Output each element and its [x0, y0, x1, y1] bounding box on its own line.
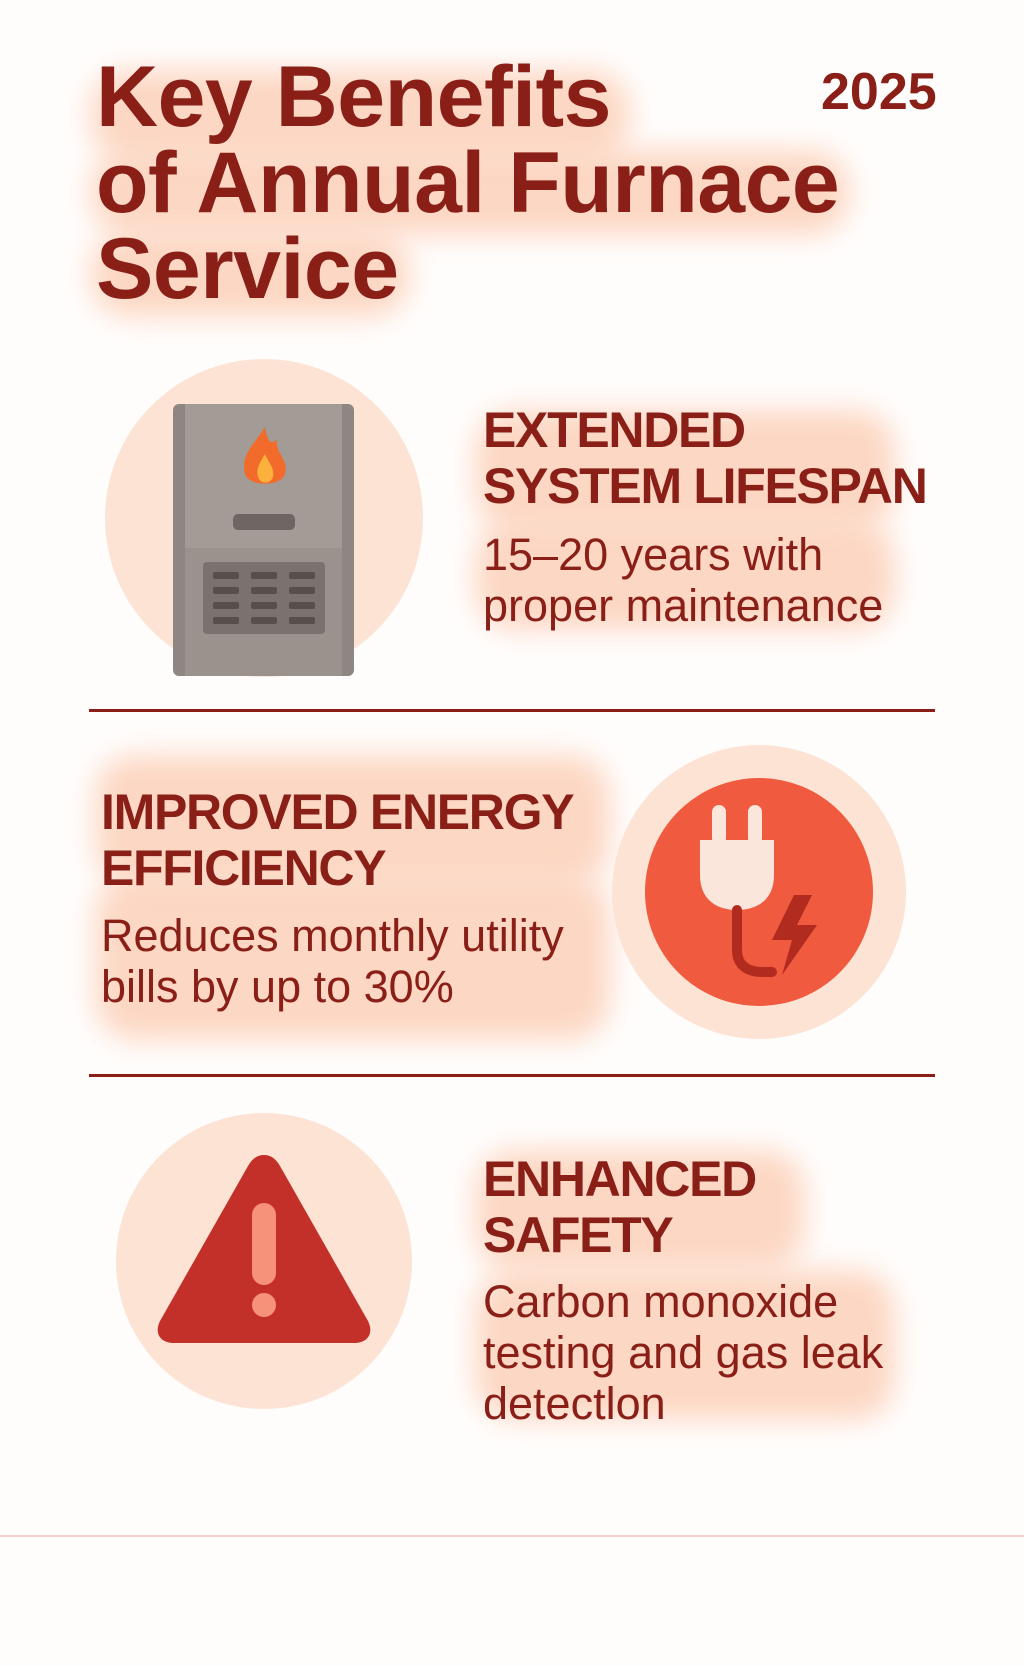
text: efficiency: Reduces monthly utility: [101, 910, 564, 961]
title: of Annual Furnace: [96, 135, 839, 231]
heading: extended system lifespan: [483, 402, 927, 514]
icon: plug: [612, 745, 906, 1039]
icon: furnace: [105, 359, 423, 677]
text: safety: Carbon monoxide: [483, 1276, 838, 1327]
heading: energy efficiency: EFFICIENCY: [101, 840, 385, 896]
year: 2025: [821, 63, 937, 121]
title: Service: [96, 221, 399, 317]
text: efficiency: [101, 910, 564, 1012]
text: lifespan: [483, 529, 883, 631]
text: lifespan: proper maintenance: [483, 580, 883, 631]
text: lifespan: 15–20 years with: [483, 529, 823, 580]
heading: energy efficiency: IMPROVED ENERGY: [101, 784, 573, 840]
heading: enhanced safety: ENHANCED: [483, 1151, 756, 1207]
heading: extended system lifespan: SYSTEM LIFESPAN: [483, 458, 927, 514]
text: safety: testing and gas leak: [483, 1327, 883, 1378]
title: Key Benefits: [96, 49, 611, 145]
text: safety: [483, 1276, 884, 1429]
heading: extended system lifespan: EXTENDED: [483, 402, 745, 458]
icon: warning: [116, 1113, 412, 1409]
text: efficiency: bills by up to 30%: [101, 961, 454, 1012]
title: [96, 49, 839, 317]
heading: energy efficiency: [101, 784, 574, 896]
heading: enhanced safety: [483, 1151, 756, 1263]
text: safety: detectlon: [483, 1378, 666, 1429]
heading: enhanced safety: SAFETY: [483, 1207, 672, 1263]
